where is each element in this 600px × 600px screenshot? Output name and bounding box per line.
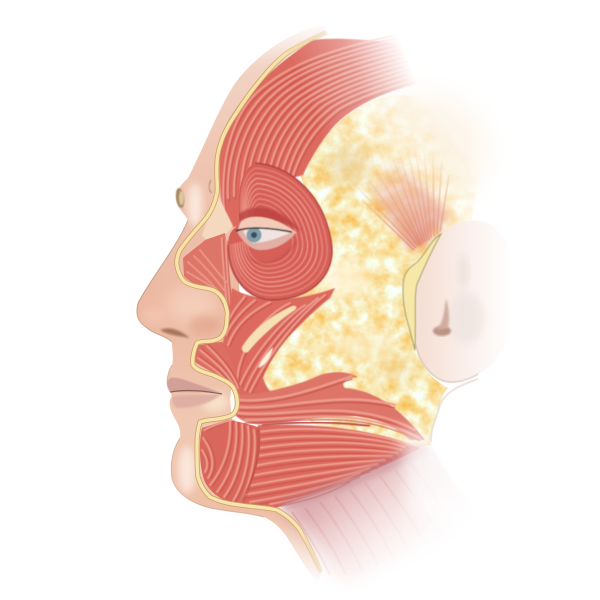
skin silhouette of the face <box>137 25 325 583</box>
ear <box>414 220 519 382</box>
haze fading the back of the neck muscles <box>400 425 470 530</box>
neck skin behind the ear <box>430 376 560 500</box>
neck contour line <box>431 379 478 442</box>
depressor anguli oris muscle <box>200 420 261 505</box>
lips <box>167 378 222 408</box>
icon: brow mark on forehead <box>175 180 212 208</box>
orbicularis outline <box>228 163 332 300</box>
platysma sheet of the lower face <box>240 422 420 508</box>
nasalis and levator muscles <box>183 233 233 322</box>
zygomatic muscles <box>222 288 335 398</box>
blurred neck transition <box>280 445 475 585</box>
levator muscle at the upper lip <box>195 342 241 396</box>
orbicularis oculi muscle <box>228 163 332 300</box>
frontalis muscle <box>219 36 414 228</box>
yellow fat border along the face <box>177 33 325 570</box>
risorius band toward the mouth <box>235 372 425 441</box>
anatomical illustration: facial muscles in profile <box>136 28 494 579</box>
temporalis fan above the ear <box>355 146 450 250</box>
soft cream tint behind the fading scalp <box>365 95 485 205</box>
nostril and nose shading <box>160 315 221 338</box>
subcutaneous fat layer <box>256 95 478 447</box>
pale nasal aponeurosis <box>202 193 233 265</box>
yellow fat patch at the ear base <box>403 234 441 350</box>
eye with lids and iris <box>236 217 297 250</box>
